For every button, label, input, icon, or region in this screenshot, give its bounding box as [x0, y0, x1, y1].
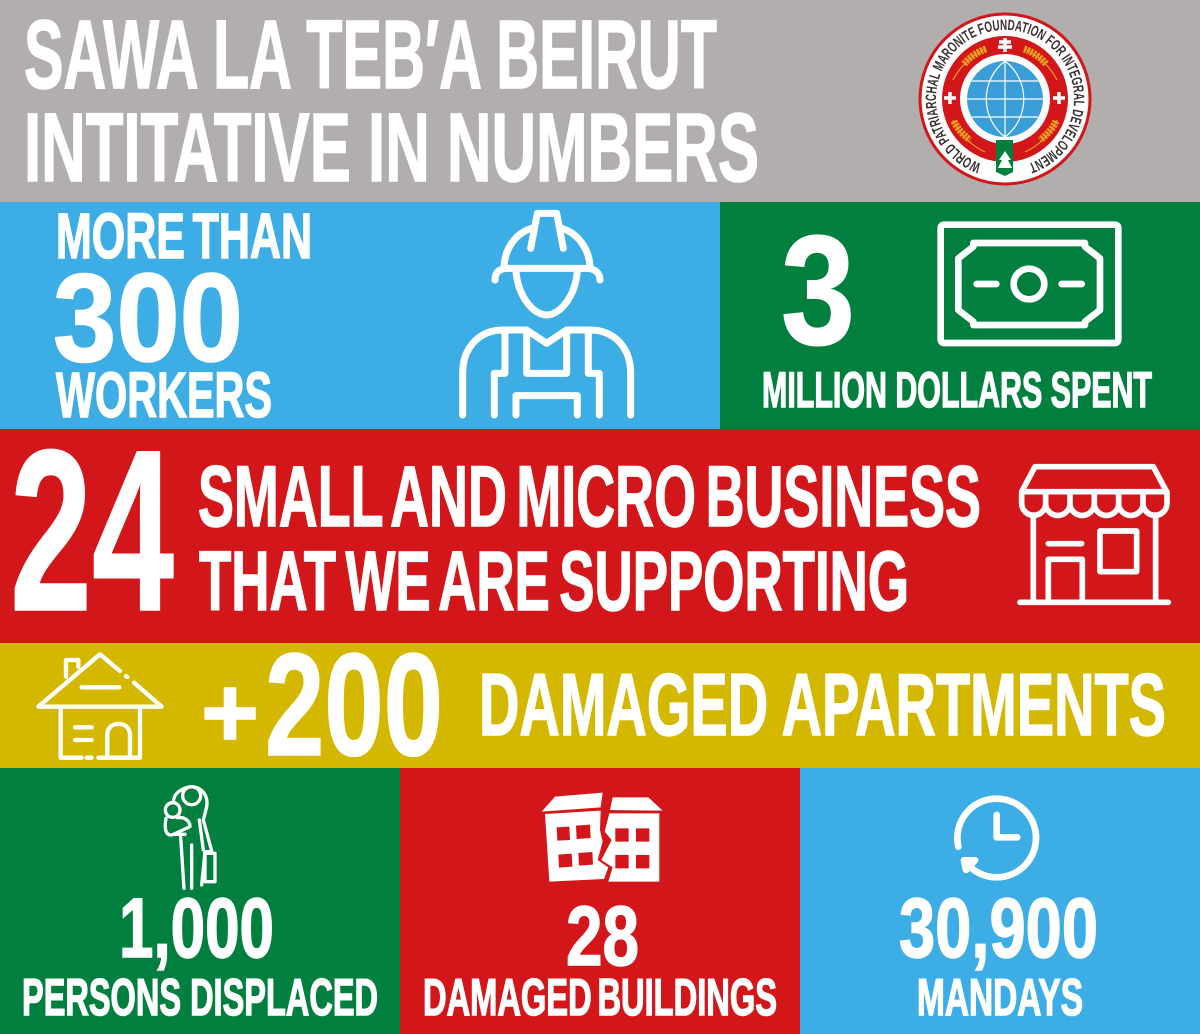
icon: cracked building — [542, 793, 663, 882]
icon: shop — [1020, 467, 1168, 602]
text: more than 300 workers — [53, 200, 312, 431]
text: 1,000: 1,000 — [119, 881, 274, 975]
title — [24, 0, 759, 202]
text: 3: 3 — [781, 204, 855, 378]
text: persons displaced: PERSONS DISPLACED — [22, 969, 378, 1027]
text: damaged buildings: DAMAGED BUILDINGS — [423, 969, 777, 1027]
panel: mandays — [800, 768, 1200, 1034]
icon: displaced person with child — [165, 787, 215, 888]
text: mandays: MANDAYS — [917, 969, 1083, 1027]
text: +200 — [201, 623, 443, 786]
title: INTITATIVE IN NUMBERS — [24, 93, 759, 202]
panel: persons displaced — [0, 768, 400, 1034]
icon: clock — [957, 799, 1036, 877]
text: +200: + — [201, 657, 259, 769]
text: more than 300 workers: 300 — [53, 249, 243, 388]
text: 24: 24 — [10, 402, 174, 659]
panel: money spent — [720, 202, 1200, 429]
panel: damaged buildings — [400, 768, 800, 1034]
text: +200: 200 — [265, 623, 443, 786]
text: more than 300 workers: WORKERS — [56, 359, 272, 431]
panel: header — [24, 0, 1092, 202]
text: 30,900: 30,900 — [899, 881, 1098, 975]
icon: foundation logo: WORLD PATRIARCHAL MARONITE FOUNDATION FOR INTEGRAL DEVELOPMENT — [926, 20, 1084, 174]
panel: damaged apartments — [0, 623, 1200, 786]
panel: workers — [0, 200, 720, 431]
icon: worker — [463, 213, 631, 415]
text: small and micro business — [198, 449, 981, 628]
panel: small businesses — [0, 402, 1200, 659]
text: 28: 28 — [566, 889, 639, 983]
icon: house — [38, 654, 162, 758]
icon: banknote — [941, 225, 1118, 343]
title: SAWA LA TEB′A BEIRUT — [24, 0, 717, 109]
text: more than 300 workers: MORE THAN — [56, 200, 312, 272]
